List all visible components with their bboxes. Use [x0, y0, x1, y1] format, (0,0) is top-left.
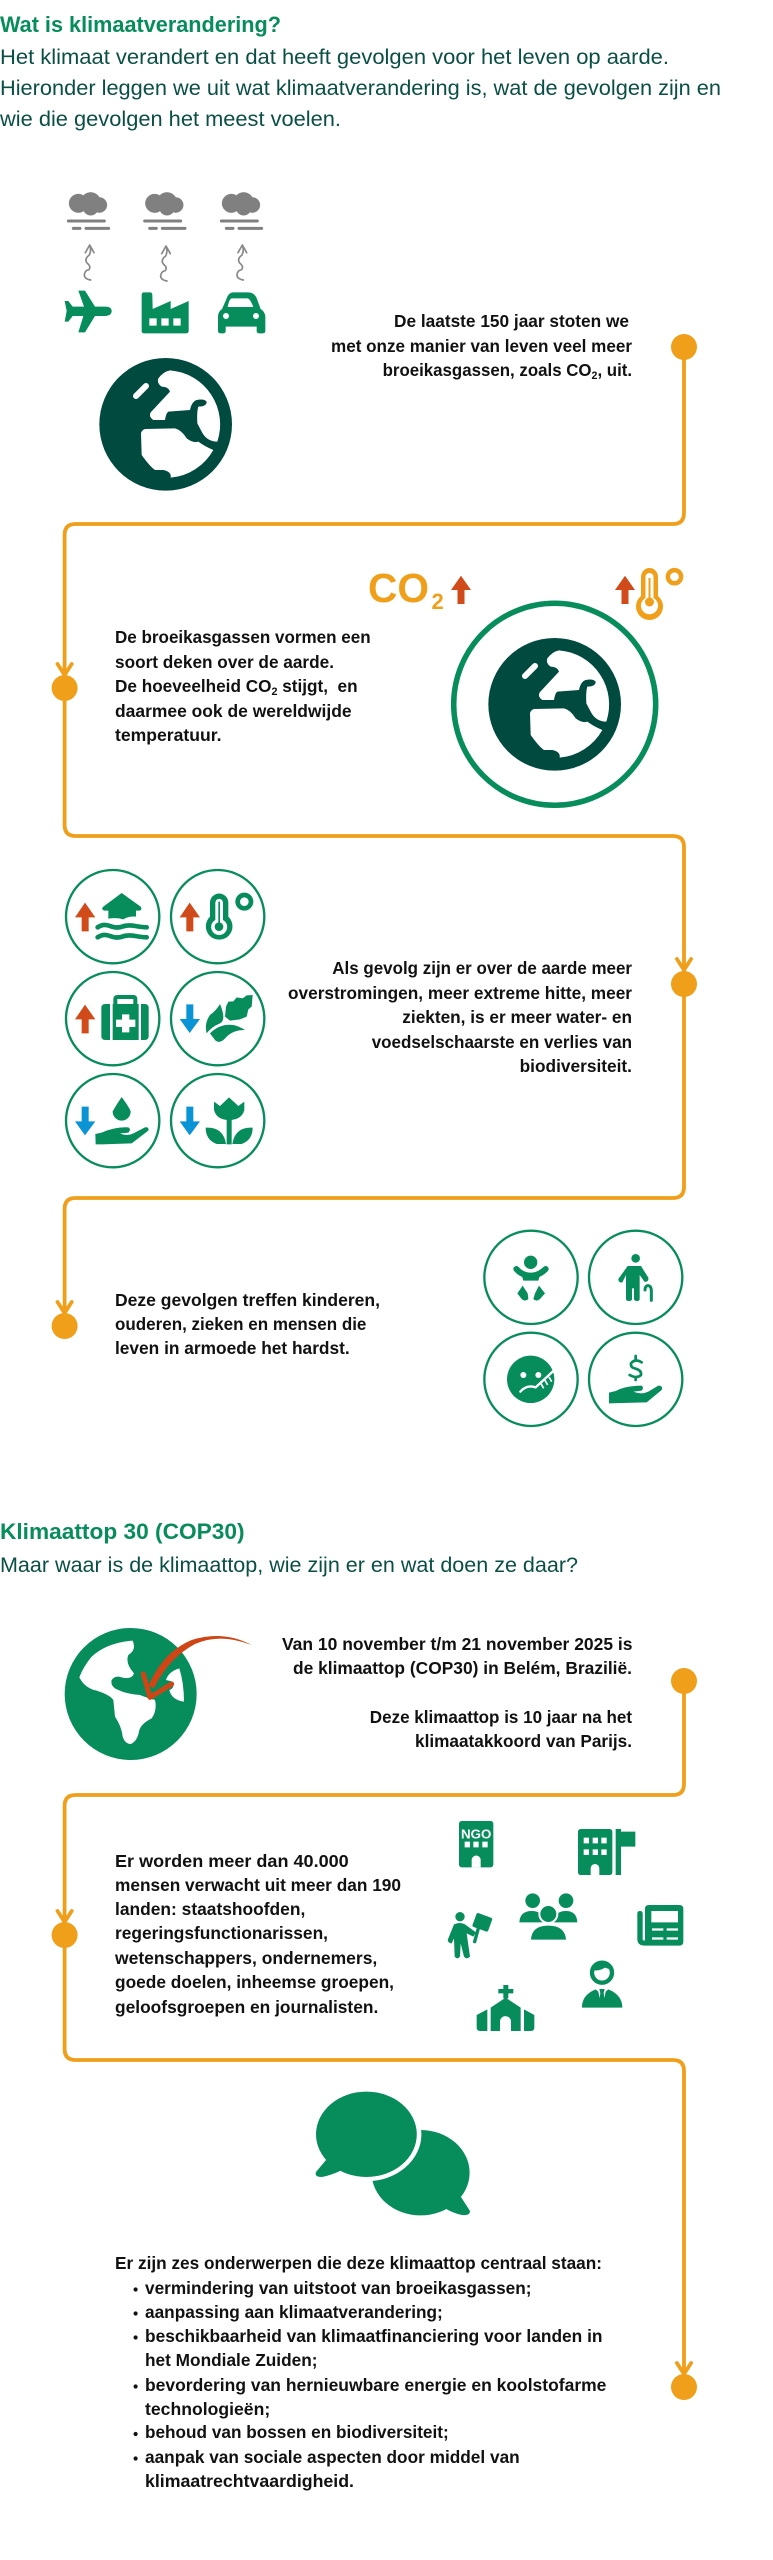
down arrows	[75, 1004, 200, 1135]
bullet list: beschikbaarheid van klimaatfinanciering voor landen in	[145, 2326, 602, 2346]
text block: step 4: ouderen, zieken en mensen die	[115, 1314, 367, 1334]
text block: step 2: daarmee ook de wereldwijde	[115, 701, 352, 721]
icon: leaves	[206, 995, 253, 1042]
icon: baby	[516, 1256, 546, 1301]
icon: thermometer	[206, 893, 251, 940]
text block: step 1: broeikasgassen, zoals CO	[383, 360, 600, 380]
text block: topics	[115, 2253, 607, 2491]
title: wat is klimaatverandering: Wat is klimaatverandering?	[0, 12, 281, 37]
text block: date and place: Deze klimaattop is 10 jaar na het	[370, 1707, 632, 1727]
icon: sick face	[507, 1356, 554, 1403]
text block: attendees: geloofsgroepen en journalisten.	[115, 1997, 378, 2017]
icon: dark globe	[99, 358, 232, 491]
intro text	[0, 45, 721, 131]
text block: step 4: Deze gevolgen treffen kinderen,	[115, 1290, 380, 1310]
text block: step 2: 2	[271, 686, 277, 698]
up arrows	[75, 903, 200, 1033]
text block: step 2	[115, 627, 371, 745]
icon: globe under blanket	[488, 638, 621, 771]
text block: attendees	[114, 1851, 401, 2017]
bullet list: klimaatrechtvaardigheid.	[145, 2471, 354, 2491]
text block: attendees: regeringsfunctionarissen,	[115, 1923, 328, 1943]
icon: person in suit	[582, 1963, 622, 2008]
icon: tulip	[206, 1097, 253, 1144]
icon: poverty hand with dollar	[609, 1356, 662, 1403]
subheading: Maar waar is de klimaattop, wie zijn er en wat doen ze daar?	[0, 1553, 578, 1577]
text block: date and place: de klimaattop (COP30) in Belém, Brazilië.	[293, 1658, 632, 1678]
icon: water drop on hand	[95, 1097, 149, 1144]
text block: step 4: leven in armoede het hardst.	[115, 1338, 350, 1358]
text block: step 2: temperatuur.	[115, 725, 222, 745]
bullet list	[134, 2278, 607, 2491]
icon: medical kit	[101, 995, 149, 1040]
CO2 label with up arrow: 2	[432, 589, 444, 614]
text block: step 1	[331, 311, 632, 382]
icon grid: consequences	[66, 870, 264, 1167]
timeline path: section 1	[52, 334, 697, 1339]
bullet list: bevordering van hernieuwbare energie en koolstofarme	[145, 2375, 607, 2395]
text block: step 1: 2	[592, 370, 597, 382]
text block: step 3: voedselschaarste en verlies van	[372, 1032, 632, 1052]
CO2 label with up arrow	[368, 565, 471, 614]
text block: step 3	[288, 958, 632, 1076]
text block: attendees: mensen verwacht uit meer dan 190	[115, 1875, 401, 1895]
intro text: Hieronder leggen we uit wat klimaatverandering is, wat de gevolgen zijn en	[0, 76, 721, 100]
icons: emissions from plane, factory, car	[65, 192, 265, 491]
text block: attendees: goede doelen, inheemse groepen,	[115, 1972, 394, 1992]
big ring around globe	[454, 603, 656, 805]
icon: protester with sign	[448, 1912, 493, 1958]
text block: date and place: klimaatakkoord van Parijs.	[415, 1731, 632, 1751]
text block: date and place: Van 10 november t/m 21 november 2025 is	[282, 1634, 633, 1654]
arrow: red curved	[143, 1636, 252, 1697]
intro text: Het klimaat verandert en dat heeft gevolgen voor het leven op aarde.	[0, 45, 669, 69]
text block: step 2: soort deken over de aarde.	[115, 652, 334, 672]
icon: building with flag	[578, 1829, 635, 1875]
bullet list: vermindering van uitstoot van broeikasgassen;	[145, 2278, 532, 2298]
text block: step 3: overstromingen, meer extreme hitte, meer	[288, 983, 632, 1003]
bullet list: het Mondiale Zuiden;	[145, 2350, 318, 2370]
icon: plane	[65, 291, 112, 332]
icon: speech bubbles	[311, 2087, 470, 2215]
rings	[484, 1231, 682, 1426]
bullet list: aanpak van sociale aspecten door middel van	[145, 2447, 520, 2467]
text block: step 1: met onze manier van leven veel meer	[331, 336, 632, 356]
text block: topics: Er zijn zes onderwerpen die deze klimaattop centraal staan:	[115, 2253, 602, 2273]
icon: elderly person	[618, 1254, 651, 1301]
text block: step 2: De broeikasgassen vormen een	[115, 627, 371, 647]
text block: step 1: De laatste 150 jaar stoten we	[394, 311, 629, 331]
bullet list: behoud van bossen en biodiversiteit;	[145, 2422, 449, 2442]
icon: newspaper	[637, 1905, 683, 1946]
icon: church	[477, 1985, 534, 2031]
text block: step 2: stijgt, en	[277, 676, 358, 696]
timeline path: section 2	[52, 1668, 697, 2400]
icon: green globe with arrow to Belem	[65, 1628, 252, 1760]
text block: step 3: biodiversiteit.	[520, 1056, 632, 1076]
CO2 label with up arrow: CO	[368, 565, 429, 611]
text block: attendees: wetenschappers, ondernemers,	[114, 1948, 377, 1968]
icon: NGO building	[459, 1821, 493, 1867]
icon: NGO building: NGO	[461, 1827, 491, 1841]
icon: factory	[142, 292, 189, 333]
bullet list: aanpassing aan klimaatverandering;	[145, 2302, 443, 2322]
icon grid: vulnerable groups	[484, 1231, 682, 1426]
text block: date and place	[282, 1634, 633, 1751]
icon: rising heat arrows	[84, 245, 247, 281]
icon: car	[218, 292, 265, 333]
icon cluster: attendees	[448, 1821, 683, 2031]
intro text: wie die gevolgen het meest voelen.	[0, 107, 341, 131]
icon: group of people	[519, 1893, 577, 1940]
bullet list: technologieën;	[145, 2399, 270, 2419]
text block: attendees: landen: staatshoofden,	[115, 1899, 305, 1919]
text block: step 3: Als gevolg zijn er over de aarde meer	[332, 958, 632, 978]
text block: step 3: ziekten, is er meer water- en	[402, 1007, 632, 1027]
rings	[66, 870, 264, 1167]
text block: step 4	[115, 1290, 380, 1358]
heading: klimaattop 30: Klimaattop 30 (COP30)	[0, 1519, 244, 1544]
icon: clouds	[68, 192, 262, 228]
icon: flooded house	[98, 893, 147, 938]
text block: step 2: De hoeveelheid CO	[115, 676, 274, 696]
temperature up icon	[615, 568, 681, 620]
text block: attendees: Er worden meer dan 40.000	[115, 1851, 349, 1871]
text block: step 1: , uit.	[597, 360, 632, 380]
